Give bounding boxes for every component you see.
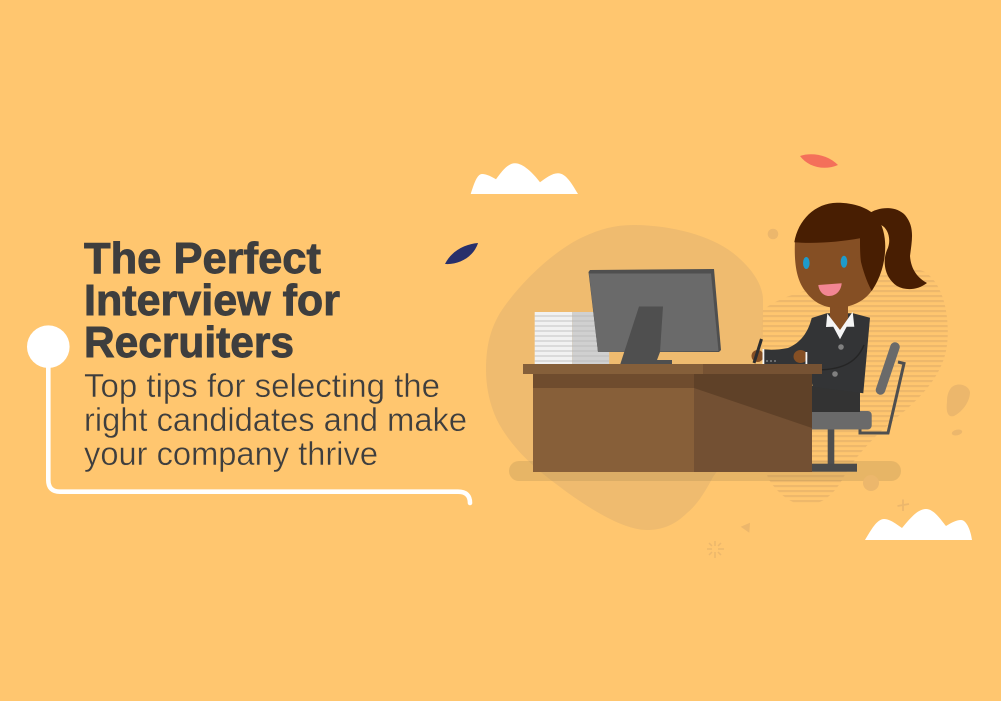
shirt collar — [826, 312, 854, 339]
icon: red leaf — [800, 154, 838, 168]
jacket — [763, 313, 870, 393]
jacket buttons — [766, 344, 844, 377]
background blob — [486, 225, 763, 530]
subtitle: your company thrive — [84, 435, 378, 472]
subtitle: Top tips for selecting the — [84, 367, 440, 404]
person — [752, 203, 927, 412]
title: Interview for — [84, 276, 340, 325]
decorative shapes — [707, 229, 970, 558]
title — [84, 234, 340, 367]
head — [795, 236, 872, 308]
title: Recruiters — [84, 318, 294, 367]
icon: cloud right — [865, 509, 972, 540]
icon: cloud left — [471, 163, 578, 194]
paper stack — [535, 312, 609, 364]
hands and pen — [752, 339, 808, 364]
ponytail — [868, 208, 927, 289]
mouth — [818, 283, 842, 296]
striped blob — [758, 268, 948, 505]
computer monitor — [588, 269, 721, 365]
floor shadow — [509, 461, 901, 481]
desk — [523, 364, 822, 472]
eyes — [803, 256, 847, 269]
icon: navy leaf — [445, 243, 478, 264]
trousers — [806, 386, 860, 412]
title: The Perfect — [84, 234, 321, 283]
neck — [830, 300, 848, 335]
ear — [856, 252, 874, 269]
subtitle: right candidates and make — [84, 401, 467, 438]
chair — [805, 347, 904, 472]
subtitle — [84, 367, 467, 472]
hair — [794, 203, 885, 291]
lapel seam — [815, 345, 864, 370]
connector line with circle — [27, 325, 470, 503]
monitor stand — [620, 306, 672, 365]
